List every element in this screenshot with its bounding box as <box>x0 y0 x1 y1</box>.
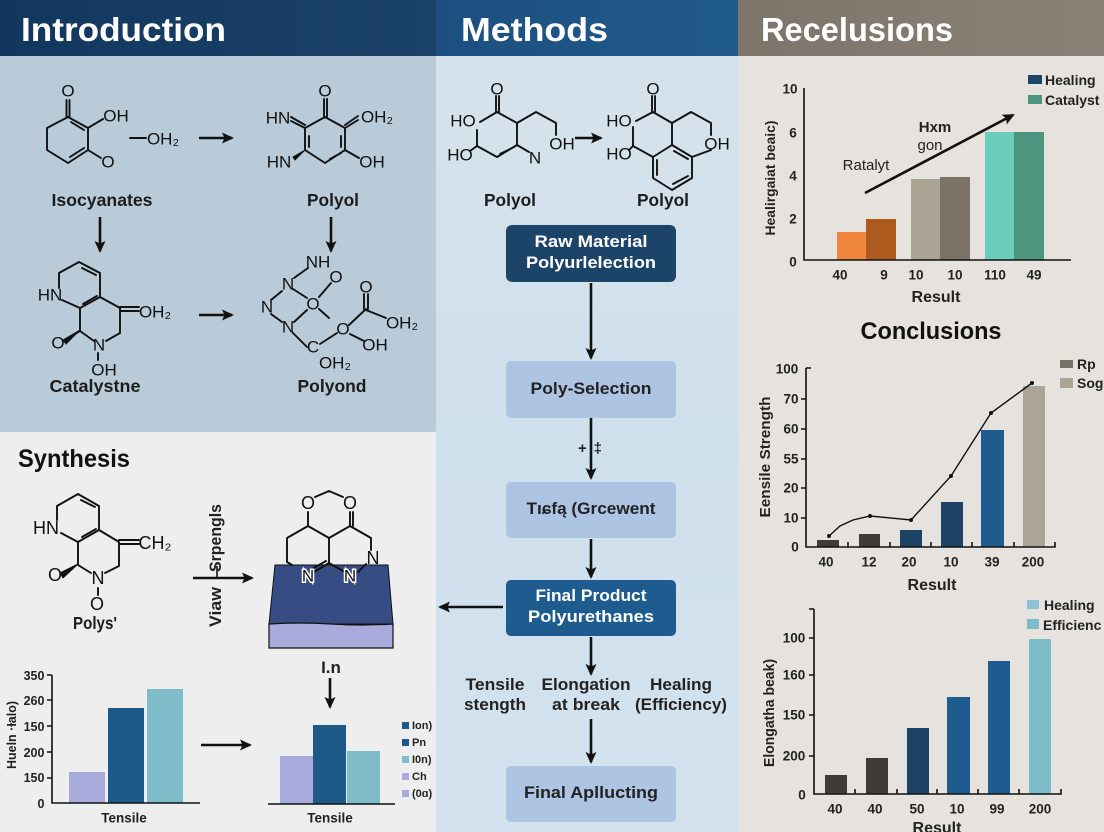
molecule: polyond: OH <box>362 336 388 354</box>
molecule: polyond: OH₂ <box>319 354 351 372</box>
molecule: polyol top: OH₂ <box>361 108 393 126</box>
property: elongation <box>542 675 630 714</box>
molecule: isocyanates: O <box>101 152 115 172</box>
arrow: catalyst to polyond <box>199 314 232 316</box>
flow box: final product <box>506 580 676 636</box>
molecule: polyol top: HN <box>267 152 291 172</box>
combo chart: tensile strength: 39 <box>984 554 1000 570</box>
introduction header: Introduction <box>21 11 226 48</box>
molecule: polyol methods left: OH <box>549 134 575 154</box>
bar chart: healing: 6 <box>789 126 797 140</box>
legend: right chart: Pn <box>412 737 426 749</box>
molecule: catalyst <box>38 262 171 380</box>
arrow: poly to treatment <box>578 418 602 478</box>
property: tensile: Tensile <box>466 675 524 694</box>
molecule: polys <box>33 494 172 614</box>
bar chart: healing: Result <box>912 289 961 306</box>
bar chart: tensile left <box>5 669 200 826</box>
molecule: polyol methods right <box>606 80 730 190</box>
label: isocyanates: Isocyanates <box>52 190 153 210</box>
combo chart: tensile strength: 200 <box>1022 554 1044 570</box>
bar chart: elongation: 0 <box>798 788 806 802</box>
label: polyol methods right: Polyol <box>637 190 689 210</box>
combo chart: tensile strength: 40 <box>818 554 834 570</box>
arrow: view strength: Viaw <box>206 586 225 627</box>
combo chart: tensile strength: 70 <box>783 392 799 406</box>
bar chart: healing: 40 <box>832 268 848 282</box>
molecule: polyol top: O <box>318 82 332 100</box>
arrow: polyol down <box>330 217 332 251</box>
bar chart: tensile left: 200 <box>24 746 44 760</box>
property: elongation: at break <box>552 695 621 714</box>
flow box: raw material <box>506 225 676 282</box>
molecule: polyol methods left: HO <box>447 146 473 164</box>
polymer substrate with molecule: N <box>366 548 380 568</box>
bar chart: elongation: 200 <box>1029 802 1051 816</box>
flow box: final application <box>506 766 676 822</box>
bar chart: tensile left: Hueln ·Ɨalo) <box>5 701 19 769</box>
legend: tensile chart: Sog <box>1077 375 1103 391</box>
property: tensile: stength <box>464 695 526 714</box>
molecule: polys: O <box>48 565 62 585</box>
polymer substrate with molecule: N <box>344 566 356 586</box>
label: in: I.n <box>321 658 341 677</box>
bar chart: healing: 110 <box>984 268 1006 282</box>
molecule: polyond: O <box>336 320 350 338</box>
results header: Recelusions <box>761 11 953 48</box>
bar chart: healing: 0 <box>789 254 797 270</box>
label: polyol: Polyol <box>307 190 359 210</box>
bar chart: healing <box>762 82 1071 306</box>
bar chart: elongation: 50 <box>909 802 925 816</box>
molecule: polyond: OH₂ <box>386 314 418 332</box>
legend: right chart: (0ɑ) <box>412 788 432 800</box>
molecule: polys: HN <box>33 518 59 538</box>
flow box: treatment <box>506 482 676 538</box>
legend: tensile chart <box>1060 356 1103 391</box>
legend: right chart <box>402 720 432 800</box>
legend: elongation chart: Efficienc <box>1043 617 1102 633</box>
bar chart: elongation: 150 <box>783 708 805 722</box>
molecule: isocyanates <box>47 82 179 172</box>
bar chart: elongation: 160 <box>783 668 805 682</box>
legend: elongation chart <box>1027 597 1102 633</box>
methods header: Methods <box>461 11 608 48</box>
bar chart: healing: 49 <box>1026 268 1042 282</box>
bar chart: tensile left: Tensile <box>101 810 147 826</box>
arrow: poly to treatment: + ‡ <box>578 440 602 457</box>
legend: right chart: I0n) <box>412 754 432 766</box>
label: polyol methods left: Polyol <box>484 190 536 210</box>
legend: right chart: Ch <box>412 771 427 783</box>
panel: introduction <box>0 0 436 432</box>
molecule: polyol methods right: OH <box>704 134 730 154</box>
molecule: isocyanates: OH₂ <box>147 130 179 148</box>
bar chart: healing: 10 <box>908 268 924 282</box>
flow box: final product: Polyurethanes <box>528 608 654 626</box>
molecule: polyond: O <box>329 268 343 286</box>
bar chart: tensile right: Tensile <box>307 810 353 826</box>
panel: results <box>738 0 1104 832</box>
bar chart: elongation: 10 <box>949 802 965 816</box>
panel: methods <box>436 0 738 832</box>
arrow: final to properties <box>590 637 592 674</box>
molecule: isocyanates: O <box>61 82 75 100</box>
arrow: properties to application <box>590 719 592 762</box>
molecule: polyond: N <box>282 318 294 336</box>
molecule: polys: CH₂ <box>138 533 172 553</box>
panel: synthesis <box>0 432 436 832</box>
molecule: polys: O <box>90 594 104 614</box>
molecule: polys: N <box>92 568 104 588</box>
legend: healing chart: Healing <box>1045 72 1096 88</box>
molecule: catalyst: N <box>93 336 105 354</box>
bar chart: tensile left: 260 <box>24 694 44 708</box>
label: catalystne: Catalystne <box>50 376 141 396</box>
label: polys: Polys' <box>73 613 117 633</box>
molecule: polyond: O <box>306 294 320 314</box>
bar chart: elongation <box>761 609 1061 832</box>
polymer substrate with molecule: N <box>302 566 314 586</box>
molecule: polyol top: HN <box>266 108 290 128</box>
molecule: polyond <box>261 252 418 372</box>
arrow: raw to poly <box>590 283 592 358</box>
bar chart: elongation: 99 <box>989 802 1005 816</box>
molecule: polyol methods left: O <box>490 80 504 98</box>
molecule: polyond: N <box>282 274 294 294</box>
property: elongation: Elongation <box>542 675 630 694</box>
bar chart: healing: 10 <box>782 82 798 96</box>
label: polyond: Polyond <box>298 376 366 396</box>
flow box: raw material: Polyurlelection <box>526 254 656 272</box>
combo chart: tensile strength: Result <box>908 577 957 594</box>
flow box: final application: Final Apllucting <box>524 784 658 802</box>
methods header <box>436 0 738 56</box>
results header <box>738 0 1104 56</box>
combo chart: tensile strength: 60 <box>783 422 799 436</box>
combo chart: tensile strength: 10 <box>943 554 959 570</box>
bar chart: tensile left: 0 <box>38 797 45 811</box>
combo chart: tensile strength: Eensile Strength <box>757 396 774 518</box>
arrow: polyol to polyol <box>575 137 601 139</box>
flow box: final product: Final Product <box>536 587 647 605</box>
combo chart: tensile strength: 10 <box>783 510 799 526</box>
arrow: view strength: Srpengls <box>206 504 225 572</box>
polymer substrate with molecule: O <box>343 493 357 513</box>
bar chart: healing: 9 <box>880 268 888 282</box>
molecule: catalyst: OH₂ <box>139 302 171 322</box>
methods background <box>436 56 738 832</box>
bar chart: elongation: 100 <box>783 630 805 646</box>
combo chart: tensile strength: 12 <box>861 554 877 570</box>
polymer substrate with molecule: N <box>302 566 314 586</box>
bar chart: elongation: Elongatha beak) <box>761 659 778 767</box>
bar chart: elongation: 200 <box>783 748 805 764</box>
bar chart: healing: 4 <box>789 168 797 184</box>
molecule: polyol methods right: O <box>646 80 660 98</box>
flow box: treatment: Tıɕfą (Grcewent <box>526 500 656 518</box>
flow box: raw material: Raw Material <box>534 233 648 251</box>
molecule: polyond: N <box>261 298 273 316</box>
molecule: catalyst: HN <box>38 286 62 304</box>
heading: conclusions: Conclusions <box>860 318 1002 345</box>
property: healing <box>635 675 727 714</box>
results background <box>738 56 1104 832</box>
molecule: catalyst: OH <box>91 360 117 380</box>
legend: tensile chart: Rp <box>1077 356 1096 372</box>
molecule: polyol methods left <box>447 80 575 168</box>
polymer substrate with molecule <box>269 491 393 648</box>
legend: elongation chart: Healing <box>1044 597 1095 613</box>
bar chart: tensile left: 350 <box>24 669 44 683</box>
combo chart: tensile strength: 20 <box>783 480 799 496</box>
flow box: poly-selection <box>506 361 676 418</box>
bar chart: healing: 10 <box>947 268 963 282</box>
combo chart: tensile strength: 0 <box>791 540 799 554</box>
molecule: polyol top <box>266 82 393 172</box>
legend: healing chart: Catalyst <box>1045 92 1100 108</box>
introduction header <box>0 0 436 56</box>
arrow: final product to synthesis <box>440 606 503 608</box>
legend: healing chart <box>1028 72 1100 108</box>
molecule: polyol top: OH <box>359 152 385 172</box>
bar chart: healing: Ratalyt <box>843 157 890 174</box>
property: healing: (Efficiency) <box>635 695 727 714</box>
legend: right chart: Ion) <box>412 720 432 732</box>
bar chart: tensile left: 150 <box>24 720 44 734</box>
polymer substrate with molecule: O <box>301 493 315 513</box>
synthesis background <box>0 432 436 832</box>
property: healing: Healing <box>650 675 712 694</box>
arrow: view strength <box>193 504 252 627</box>
arrow: isocyanates to polyol <box>199 137 232 139</box>
molecule: polyol methods right: HO <box>606 144 632 164</box>
bar chart: healing: gon <box>917 137 943 154</box>
heading: synthesis: Synthesis <box>18 445 130 473</box>
molecule: polyol methods left: HO <box>450 112 476 130</box>
bar chart: tensile left: 150 <box>24 771 44 785</box>
bar chart: elongation: 40 <box>827 802 843 816</box>
molecule: isocyanates: OH <box>103 106 129 126</box>
combo chart: tensile strength: 100 <box>776 362 798 376</box>
molecule: polyond: O <box>359 278 373 296</box>
bar chart: healing: 2 <box>789 212 797 226</box>
arrow: in down <box>329 678 331 707</box>
molecule: polyond: NH <box>306 252 330 272</box>
bar chart: elongation: 40 <box>867 802 883 816</box>
introduction background <box>0 56 436 432</box>
bar chart: healing: Healirgaiat beaic) <box>762 120 778 236</box>
molecule: polyol methods right: HO <box>606 112 632 130</box>
arrow: treatment to final <box>590 539 592 577</box>
molecule: polyond: C <box>307 338 319 356</box>
flow box: poly-selection: Poly-Selection <box>530 380 652 398</box>
bar chart: tensile right <box>268 725 395 826</box>
arrow: chart to chart <box>201 744 250 746</box>
molecule: catalyst: O <box>51 334 65 352</box>
combo chart: tensile strength: 20 <box>901 554 917 570</box>
property: tensile <box>464 675 526 714</box>
arrow: isocyanates down <box>99 217 101 251</box>
combo chart: tensile strength <box>757 362 1055 594</box>
combo chart: tensile strength: 55 <box>783 452 799 466</box>
bar chart: healing: Hxm <box>919 119 951 136</box>
polymer substrate with molecule: N <box>344 566 356 586</box>
molecule: polyol methods left: N <box>529 148 541 168</box>
